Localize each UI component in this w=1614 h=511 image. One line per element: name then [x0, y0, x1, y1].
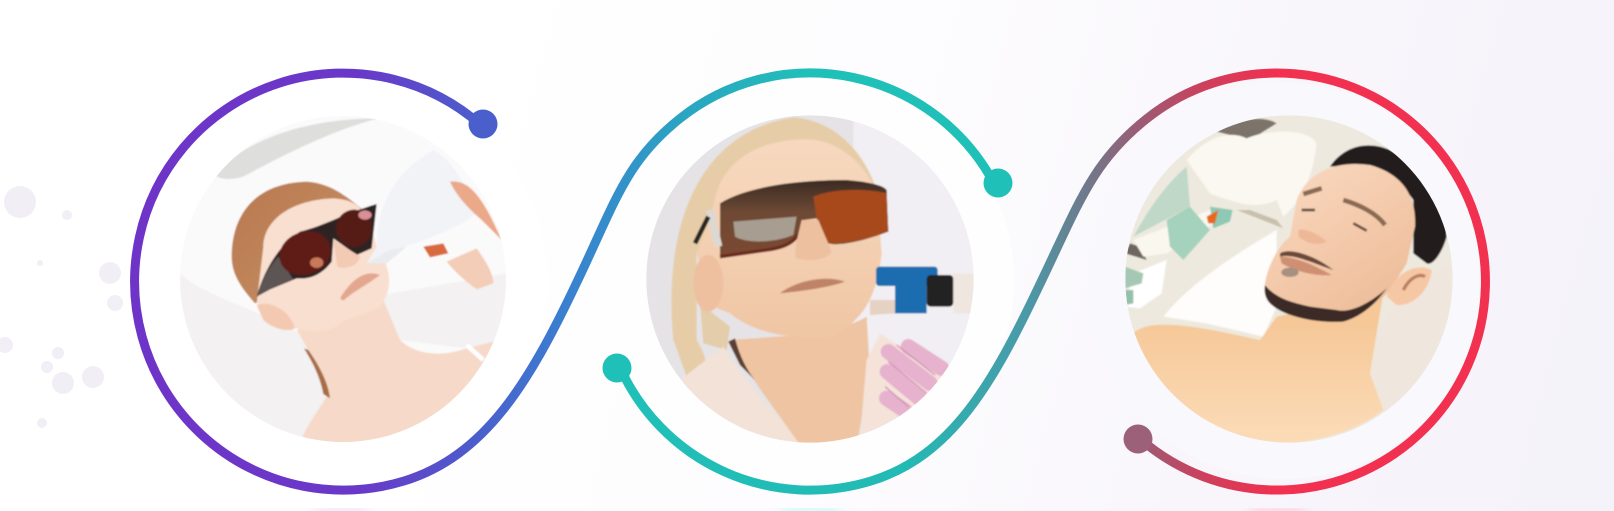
dot: teal endpoint left	[602, 354, 632, 382]
curve: teal to red line	[620, 73, 1485, 490]
decorative pale dots	[0, 186, 123, 428]
dot: mauve endpoint	[1124, 424, 1152, 454]
white ring discs	[139, 77, 1483, 485]
panel: photo of man	[1123, 113, 1457, 447]
bottom glow strips	[313, 510, 1306, 511]
panel: photo of woman with red hair	[177, 113, 510, 447]
dot: blue endpoint	[468, 110, 498, 138]
dot: teal endpoint right	[984, 168, 1012, 198]
curve: purple to teal line	[135, 73, 995, 490]
panel: photo of blonde woman	[643, 113, 977, 447]
